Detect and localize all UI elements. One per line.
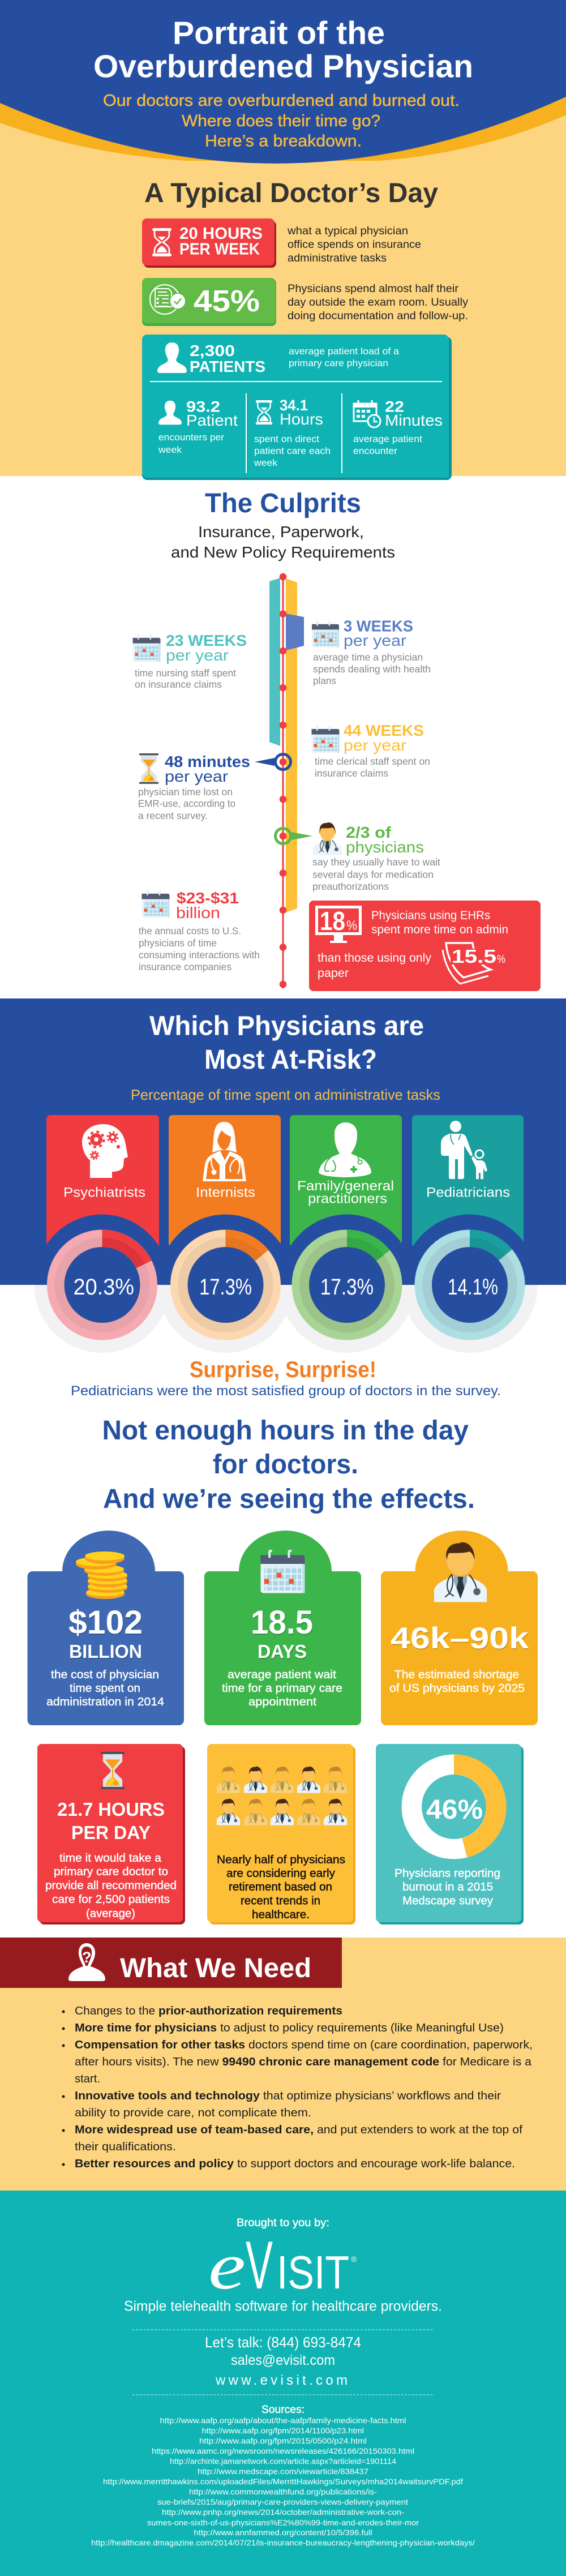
card: internists: Internists [196,1185,255,1200]
stat: 3 weeks: spends dealing with health [313,663,431,675]
stat: 45% [142,278,276,326]
icon: hourglass with coins [101,1752,125,1789]
donut: 46% burnout: 46% [426,1795,483,1825]
stat: $23-$31 billion: physicians of time [139,937,217,949]
stat: 48 minutes: EMR-use, according to [138,798,235,809]
stat: 23 weeks: on insurance claims [135,679,222,690]
stat: 44 weeks: per year [344,736,406,754]
icon: person [157,342,187,373]
stat: 3 weeks: plans [313,675,336,686]
stat: $23-$31 billion: billion [176,904,220,921]
icon: male doctor [319,1122,371,1177]
heading: not enough hours [102,1416,475,1514]
donut: internists 17.3% [170,1229,281,1340]
heading: what we need: What We Need [120,1953,311,1983]
stat: 44 weeks: insurance claims [315,768,388,779]
stat: 48 minutes [138,753,250,821]
icon: hourglass with coins [139,753,158,784]
list: needs: More widespread use of team-based care, and put extenders to work at the top of [75,2123,522,2136]
title [93,15,473,85]
card: early retirement: retirement based on [229,1881,332,1893]
card: early retirement: healthcare. [252,1909,310,1921]
text: 20 hours description: what a typical physician [287,225,408,237]
text: sources: sumes-one-sixth-of-us-physicians%E2%80%99-time-and-erodes-their-mor [147,2518,419,2527]
callout: surprise: Surprise, Surprise! [190,1357,376,1382]
text: contact details: Let’s talk: (844) 693-8474 [205,2334,361,2351]
text: sources: http://www.annfammed.org/content/10/5/396.full [194,2528,372,2537]
card: pediatricians [412,1115,524,1245]
icon: calendar [260,1551,305,1593]
icon: person with question mark [68,1943,105,1981]
list: needs: Innovative tools and technology that optimize physicians’ workflows and their [75,2089,501,2102]
stat: encounter minutes [353,398,443,456]
card: early retirement: Nearly half of physicians [217,1854,345,1866]
subheading: percentage of time: Percentage of time spent on administrative tasks [131,1086,440,1103]
icon: monitor 18%: 18 [320,906,345,936]
stat: $23-$31 billion: insurance companies [139,961,231,972]
stat: direct care hours: spent on direct [254,434,319,444]
card: 18.5 days: time for a primary care [222,1682,342,1695]
text: sources: http://www.aafp.org/fpm/2015/0500/p24.html [199,2436,367,2445]
pictogram: doctors [217,1767,347,1825]
text: sources: http://archinte.jamanetwork.com/article.aspx?articleid=1901114 [170,2457,396,2466]
card: 21.7 hours per day: (average) [86,1908,135,1920]
text: 20 hours description: administrative tasks [288,252,387,264]
card: $102 billion: time spent on [70,1682,140,1695]
text: 45% description [288,283,469,322]
list: needs: More time for physicians to adjust to policy requirements (like Meaningful Use) [75,2021,504,2034]
card: burnout [376,1744,524,1925]
stat: patient encounters: Patient [186,412,238,429]
text: EHR description: than those using only [318,951,431,965]
card: 18.5 days: DAYS [258,1641,307,1662]
stat: 2/3 of physicians: say they usually have to wait [312,856,440,868]
stat: 2/3 of physicians [312,822,440,892]
callout: surprise [71,1357,501,1399]
list: needs: Compensation for other tasks doctors spend time on (care coordination, paperwork, [75,2038,533,2051]
heading: Which Physicians are Most At-Risk?: Most At-Risk? [204,1045,377,1075]
card: 21.7 hours per day [37,1744,185,1925]
text: EHR description: spent more time on admin [371,923,508,936]
card: 18.5 days: average patient wait [228,1669,336,1681]
card: family/general practitioners: practitioners [308,1191,387,1207]
logo: eVisit: ISIT [277,2246,349,2299]
text: sources: http://www.merritthawkins.com/uploadedFiles/MerrittHawkings/Surveys/mha2014waitsurvPDF.pdf [103,2477,463,2486]
stat label: PER WEEK [179,240,260,258]
logo: eVisit [208,2227,357,2303]
icon: doctor with child [441,1121,487,1179]
text: 20 hours description [287,225,421,264]
donut arches [34,1215,538,1285]
text: sources: Sources: [261,2404,305,2416]
card: 18.5 days: appointment [248,1696,316,1708]
heading: A Typical Doctor's Day: A Typical Doctor’s Day [144,178,438,208]
icon: calendar [132,635,161,662]
logo: eVisit: e [208,2229,246,2303]
icon: calendar [311,726,340,753]
text: sources: http://www.aafp.org/aafp/about/the-aafp/family-medicine-facts.html [160,2416,406,2425]
icon: paper 15.5%: % [497,953,505,966]
stat: 3 weeks [312,617,431,686]
list: needs: start. [75,2072,100,2085]
stat: 44 weeks [311,722,430,779]
heading: Which Physicians are Most At-Risk?: Which Physicians are [149,1011,424,1041]
stat: 48 minutes: physician time lost on [138,786,233,798]
subtitle [103,92,460,151]
header banner [0,0,566,164]
stat: $23-$31 billion: consuming interactions with [139,949,260,961]
card: 21.7 hours per day: PER DAY [71,1822,151,1843]
text: contact details: sales@evisit.com [231,2352,335,2368]
stat: 23 weeks [132,632,247,690]
text: EHR description [318,909,508,980]
stat label [179,225,263,258]
text: sources: http://www.commonwealthfund.org/publications/is- [189,2487,377,2496]
heading: not enough hours: Not enough hours in the day [102,1416,469,1446]
text: patient load description: average patient load of a [289,346,400,357]
icon: monitor 18% [317,906,360,943]
card: 21.7 hours per day: 21.7 HOURS [57,1799,165,1820]
logo: eVisit: V [246,2227,273,2303]
subheading: culprits: Insurance, Paperwork, [198,523,364,541]
icon: hourglass [152,228,171,256]
icon: paper 15.5% [443,943,505,984]
card: $102 billion [27,1531,184,1725]
card: pediatricians: Pediatricians [426,1185,510,1200]
text: sources: http://www.aafp.org/fpm/2014/1100/p23.html [201,2426,364,2435]
card: $102 billion: $102 [68,1604,143,1641]
text: 45% description: doing documentation and follow-up. [288,310,468,322]
stat: patient encounters: week [158,444,182,455]
card: 21.7 hours per day: care for 2,500 patients [52,1893,170,1906]
callout: EHR vs paper [309,901,541,991]
card: internists [169,1115,281,1245]
marker: blue arrow [255,754,291,770]
stat: $23-$31 billion: the annual costs to U.S. [139,925,241,936]
stat: 2/3 of physicians: 2/3 of [346,824,392,841]
card: burnout: burnout in a 2015 [402,1881,493,1893]
icon: checklist [150,285,186,314]
icon: coins [76,1551,127,1599]
stat: 3 weeks: average time a physician [313,651,423,663]
stat: 44 weeks: 44 WEEKS [344,722,424,739]
stat: $23-$31 billion: $23-$31 [177,889,239,907]
panel: typical day background [0,0,566,476]
icon: calendar [312,622,339,648]
marker: green arrow [275,829,312,843]
stat: 2,300 patients: PATIENTS [190,358,265,375]
donut: 46% burnout [402,1755,506,1859]
list: needs: Better resources and policy to support doctors and encourage work-life balance. [75,2157,515,2170]
card: family/general practitioners: Family/general [297,1178,394,1194]
stat: 2/3 of physicians: preauthorizations [312,881,389,892]
card: 21.7 hours per day: provide all recommended [45,1879,177,1892]
subtitle: Where does their time go? [182,112,380,130]
stat: 3 weeks: 3 WEEKS [344,617,413,635]
list: needs: their qualifications. [75,2140,176,2153]
text: sources: http://healthcare.dmagazine.com/2014/07/21/is-insurance-bureaucracy-lengthening-physician-workdays/ [91,2538,475,2547]
stat: 48 minutes: per year [165,768,228,785]
blue tab [286,614,304,650]
donut: pediatricians 14.1% [414,1229,525,1340]
card: psychiatrists [46,1115,159,1245]
donut: family practitioners 17.3% [292,1229,402,1340]
timeline dots [280,573,286,988]
stat: patient encounters [158,398,238,455]
card: physician shortage [381,1531,538,1725]
heading: not enough hours: And we’re seeing the effects. [103,1484,475,1514]
card: 21.7 hours per day: time it would take a [59,1852,162,1865]
stat: patient encounters: 93.2 [186,398,220,415]
card: 21.7 hours per day: primary care doctor to [54,1866,168,1878]
stat: 23 weeks: per year [166,646,229,664]
card: physician shortage: The estimated shortage [395,1669,519,1681]
icon: doctor [313,822,342,855]
text: contact details [205,2334,361,2388]
card: burnout: Physicians reporting [395,1867,500,1880]
stat: encounter minutes: 22 [385,398,404,415]
yellow band [286,578,297,912]
donut: family practitioners 17.3%: 17.3% [320,1275,374,1300]
text: patient load description [289,346,400,368]
timeline [255,573,312,988]
card: physician shortage: of US physicians by 2025 [389,1682,525,1695]
stat: direct care hours: week [254,457,278,468]
text: patient load description: primary care physician [289,358,388,368]
subheading: culprits: and New Policy Requirements [171,543,395,561]
heading: not enough hours: for doctors. [213,1450,358,1480]
icon: female doctor [203,1122,246,1181]
panel: what we need [0,1938,566,2191]
logo: eVisit: ® [351,2254,357,2264]
card: early retirement [207,1744,355,1925]
text: 20 hours description: office spends on insurance [288,239,421,251]
subtitle: Our doctors are overburdened and burned out. [103,92,460,110]
text: contact details: www.evisit.com [215,2373,348,2388]
card: physician shortage: 46k–90k [391,1622,529,1655]
stat: 2,300 patients [190,342,265,375]
blue header shape [0,0,566,164]
card: $102 billion: BILLION [69,1641,142,1662]
card: 18.5 days [204,1531,361,1725]
subtitle: Here’s a breakdown. [205,132,362,151]
text: brought to you by: Brought to you by: [237,2217,329,2229]
heading band [0,1938,342,1988]
stat: 2/3 of physicians: physicians [346,838,424,856]
card: 18.5 days: 18.5 [251,1604,313,1641]
stat: $23-$31 billion [139,889,260,972]
heading: The Culprits: The Culprits [205,488,361,518]
text: sources [91,2404,475,2547]
card: psychiatrists: Psychiatrists [63,1185,145,1200]
stat: encounter minutes: Minutes [385,412,443,429]
teal band [269,578,280,746]
text: sources: https://www.aamc.org/newsroom/newsreleases/426166/20150303.html [152,2446,414,2455]
panel: most at-risk [0,998,566,1285]
orange curve accent [0,91,566,161]
text: 45% description: Physicians spend almost half their [288,283,459,295]
text: sources: sue-briefs/2015/aug/primary-care-providers-views-delivery-payment [157,2497,408,2506]
icon: doctor [434,1542,487,1602]
donut: internists 17.3%: 17.3% [199,1275,252,1300]
card: early retirement: recent trends in [241,1895,320,1908]
stat: 23 weeks: time nursing staff spent [135,667,236,679]
stat: direct care hours [254,397,331,468]
list: needs: Changes to the prior-authorization requirements [75,2004,342,2017]
text: sources: http://www.pnhp.org/news/2014/october/administrative-work-con- [162,2508,404,2517]
text: tagline: Simple telehealth software for healthcare providers. [124,2298,442,2314]
stat: 23 weeks: 23 WEEKS [166,632,247,649]
icon: calendar [142,891,170,918]
stat: 3 weeks: per year [344,632,406,649]
text: sources: http://www.medscape.com/viewarticle/838437 [198,2467,368,2476]
card: burnout: Medscape survey [402,1895,493,1908]
callout: surprise: Pediatricians were the most satisfied group of doctors in the survey. [71,1383,501,1399]
panel: footer [0,2191,566,2576]
stat value: 45% [194,284,260,318]
stat: 44 weeks: time clerical staff spent on [315,756,430,767]
card: $102 billion: administration in 2014 [46,1696,164,1708]
stat: 2/3 of physicians: several days for medication [312,869,434,880]
text: 45% description: day outside the exam room. Usually [288,297,469,308]
stat: direct care hours: Hours [280,410,323,428]
card: family/general practitioners [290,1115,402,1245]
stat: patient encounters: encounters per [158,432,224,443]
list: needs [62,2004,533,2170]
card: $102 billion: the cost of physician [51,1669,159,1681]
stat: 20 hours per week [142,218,276,268]
text: EHR description: Physicians using EHRs [371,909,490,922]
text: EHR description: paper [318,967,349,980]
donut: pediatricians 14.1%: 14.1% [448,1275,498,1300]
icon: paper 15.5%: 15.5 [452,946,496,967]
subheading: culprits [171,523,395,561]
stat: 2,300 patients: 2,300 [190,342,235,359]
list: needs: ability to provide care, not complicate them. [75,2106,311,2119]
stat label: 20 HOURS [179,225,263,243]
stat: encounter minutes: average patient [353,434,422,444]
panel: patient load [142,335,452,480]
card: early retirement: are considering early [226,1867,335,1880]
stat: 48 minutes: a recent survey. [138,810,208,821]
donut: psychiatrists 20.3% [47,1229,157,1340]
donut shadows [34,1217,538,1353]
heading: Which Physicians are Most At-Risk? [149,1011,424,1075]
title: Portrait of the [173,15,385,51]
icon: person with question mark: ? [82,1949,92,1966]
stat: encounter minutes: encounter [353,445,397,456]
title: Overburdened Physician [93,49,473,85]
stat: 48 minutes: 48 minutes [165,753,250,770]
stat: direct care hours: patient care each [254,445,331,456]
list: needs: after hours visits). The new 99490 chronic care management code for Medicare is a [75,2055,532,2068]
icon: monitor 18%: % [346,918,357,933]
donut: psychiatrists 20.3%: 20.3% [74,1275,134,1300]
stat: direct care hours: 34.1 [280,397,308,414]
icon: head with gears [82,1124,128,1178]
